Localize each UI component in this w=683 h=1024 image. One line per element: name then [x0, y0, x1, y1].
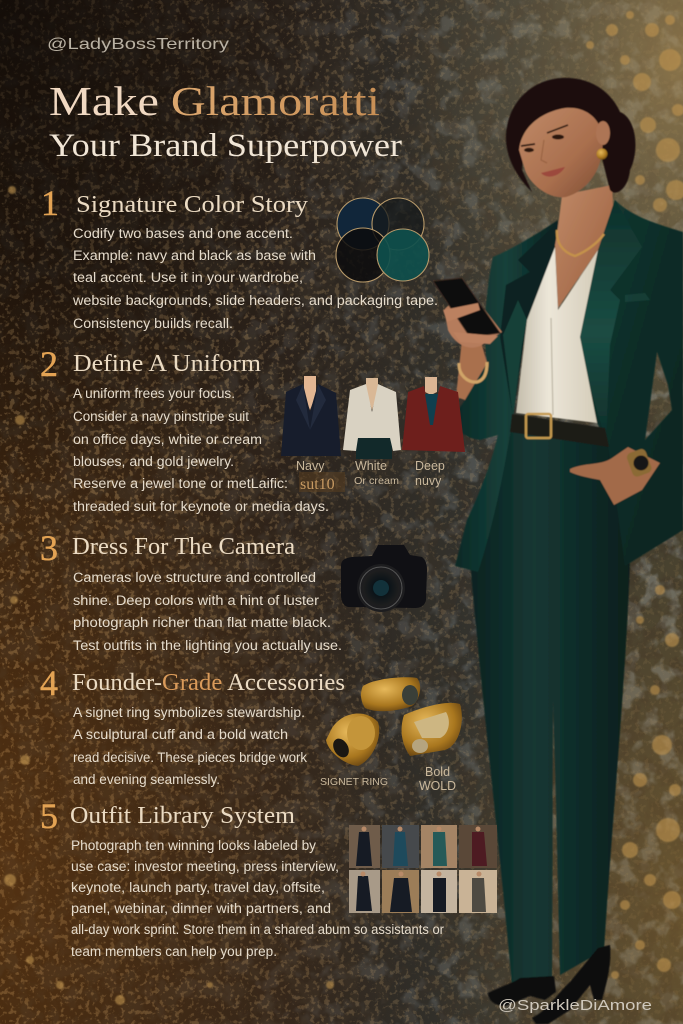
handle: bottom right: @SparkleDiAmore — [498, 997, 652, 1014]
heading 4: Founder-Grade Accessories — [72, 670, 345, 696]
text block 5: team members can help you prep. — [71, 944, 277, 959]
number 4: 4 — [40, 663, 58, 703]
text block 5 — [71, 838, 444, 959]
text block 5: panel, webinar, dinner with partners, and — [71, 901, 331, 916]
heading 2: Define A Uniform — [73, 351, 261, 377]
text block 1 — [72, 226, 438, 331]
burgundy suit on mannequin — [402, 377, 465, 452]
text block 4: read decisive. These pieces bridge work — [73, 750, 307, 765]
text block 2: on office days, white or cream — [73, 432, 262, 447]
jacket left — [453, 220, 558, 572]
suit labels: Or cream — [354, 475, 399, 487]
icon: signet ring — [326, 713, 379, 766]
title — [49, 78, 402, 164]
ring labels — [320, 765, 456, 793]
text block 3: photograph richer than flat matte black. — [73, 615, 331, 630]
belt — [510, 414, 609, 447]
panel: 1 signature color story — [41, 183, 438, 331]
text block 4: and evening seamlessly. — [73, 772, 220, 787]
title: Make Glamoratti — [49, 78, 380, 124]
panel: 4 founder-grade accessories — [40, 663, 462, 793]
woman figure — [433, 78, 683, 1024]
text block 1: website backgrounds, slide headers, and packaging tape. — [72, 293, 438, 308]
ring labels: SIGNET RING — [320, 776, 388, 788]
text block 2: threaded suit for keynote or media days. — [73, 499, 329, 514]
phone — [433, 278, 500, 337]
suit labels — [296, 459, 445, 493]
neck and chest — [555, 185, 613, 308]
icon: camera — [341, 545, 427, 612]
suit labels: Deep — [415, 459, 445, 473]
bracelet — [459, 362, 487, 382]
text block 1: Example: navy and black as base with — [73, 248, 316, 263]
trousers — [470, 425, 630, 985]
text block 2: A uniform frees your focus. — [73, 386, 235, 401]
ear and earring — [596, 121, 610, 160]
text block 4: A sculptural cuff and a bold watch — [73, 727, 288, 742]
text block 2: Consider a navy pinstripe suit — [73, 409, 249, 424]
text block 2 — [73, 386, 329, 514]
text block 3 — [73, 570, 342, 653]
suit labels: nuvy — [415, 474, 442, 488]
icon: bold ring — [402, 703, 462, 756]
panel: 2 define a uniform — [40, 344, 465, 514]
text block 1: Codify two bases and one accent. — [73, 226, 293, 241]
panel: 3 dress for the camera — [40, 528, 427, 653]
text block 2: Reserve a jewel tone or metLaific: — [73, 476, 288, 491]
text block 4 — [73, 705, 307, 787]
text block 5: keynote, launch party, travel day, offsite, — [71, 880, 325, 895]
text block 5: all-day work sprint. Store them in a shared abum so assistants or — [71, 922, 444, 937]
blouse — [516, 247, 598, 423]
hair back and bun — [506, 78, 635, 193]
navy suit on mannequin — [281, 376, 341, 456]
hand in pocket with watch — [570, 447, 660, 505]
suit labels: sut10 — [300, 476, 335, 493]
lapels — [500, 222, 558, 417]
icon: overlapping colour circles — [336, 198, 429, 282]
number 5: 5 — [40, 796, 58, 836]
forearm and hand holding phone — [433, 278, 502, 400]
heading 5: Outfit Library System — [70, 803, 295, 829]
suit labels: Navy — [296, 459, 325, 473]
number 3: 3 — [40, 528, 58, 568]
panel: 5 outfit library system — [40, 796, 497, 959]
suit labels: White — [355, 459, 387, 473]
ring labels: Bold — [425, 765, 450, 779]
white suit on mannequin — [343, 378, 401, 459]
number 2: 2 — [40, 344, 58, 384]
face — [519, 108, 603, 197]
jacket right — [580, 200, 683, 566]
necklace — [557, 230, 604, 256]
text block 3: Cameras love structure and controlled — [73, 570, 316, 585]
text block 5: use case: investor meeting, press interview, — [71, 859, 339, 874]
text block 1: teal accent. Use it in your wardrobe, — [73, 270, 303, 285]
text block 4: A signet ring symbolizes stewardship. — [73, 705, 305, 720]
facial features — [521, 125, 568, 177]
ring labels: WOLD — [419, 779, 456, 793]
heading 1: Signature Color Story — [76, 192, 308, 218]
shoes — [488, 945, 610, 1024]
photo grid: eight outfit looks — [349, 825, 497, 913]
heading 3: Dress For The Camera — [72, 534, 295, 560]
text block 2: blouses, and gold jewelry. — [73, 454, 234, 469]
text block 5: Photograph ten winning looks labeled by — [71, 838, 316, 853]
text block 3: shine. Deep colors with a hint of luster — [73, 593, 320, 608]
icon: gold cuff — [361, 677, 420, 711]
title: Your Brand Superpower — [49, 128, 402, 164]
handle: top: @LadyBossTerritory — [47, 36, 229, 53]
number 1: 1 — [41, 183, 59, 223]
text block 1: Consistency builds recall. — [73, 316, 233, 331]
text block 3: Test outfits in the lighting you actually use. — [73, 638, 342, 653]
